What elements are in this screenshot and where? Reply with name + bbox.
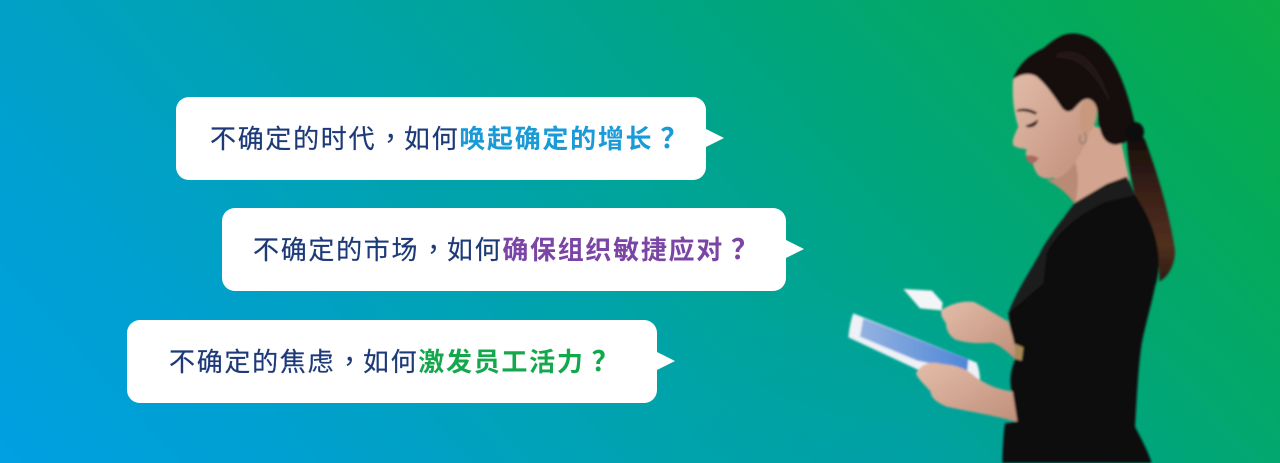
eye and brow [1017,109,1038,127]
illustration: woman holding tablet and card [846,32,1176,463]
bubble tail [786,240,804,258]
neck shadow [1047,162,1078,204]
watch [1013,343,1023,361]
earring [1080,133,1086,144]
speech bubble: employee vitality [127,320,657,403]
lower hand [916,363,1017,422]
jacket lapel [1008,177,1135,313]
question: employee vitality: 不确定的焦虑 ，如何激发员工活力？ [169,339,621,377]
speech bubble: agile organisation [222,208,786,291]
hair tie [1125,122,1144,142]
bubble tail [706,129,724,147]
hair [1013,33,1135,145]
question: growth: 不确定的时代 ，如何唤起确定的增长？ [210,116,690,154]
jacket [1002,177,1159,463]
hair highlight [1057,51,1112,107]
speech bubble: growth [176,97,706,180]
neck [1053,120,1129,204]
tablet [848,313,980,381]
card [903,289,943,310]
lips [1025,155,1039,163]
bubble tail [657,352,675,370]
tablet screen [860,318,968,371]
face [1013,60,1093,178]
question: agile organisation: 不确定的市场 ，如何确保组织敏捷应对？ [253,227,761,265]
upper hand [941,302,1015,357]
ponytail [1127,133,1175,282]
ear [1080,100,1097,135]
